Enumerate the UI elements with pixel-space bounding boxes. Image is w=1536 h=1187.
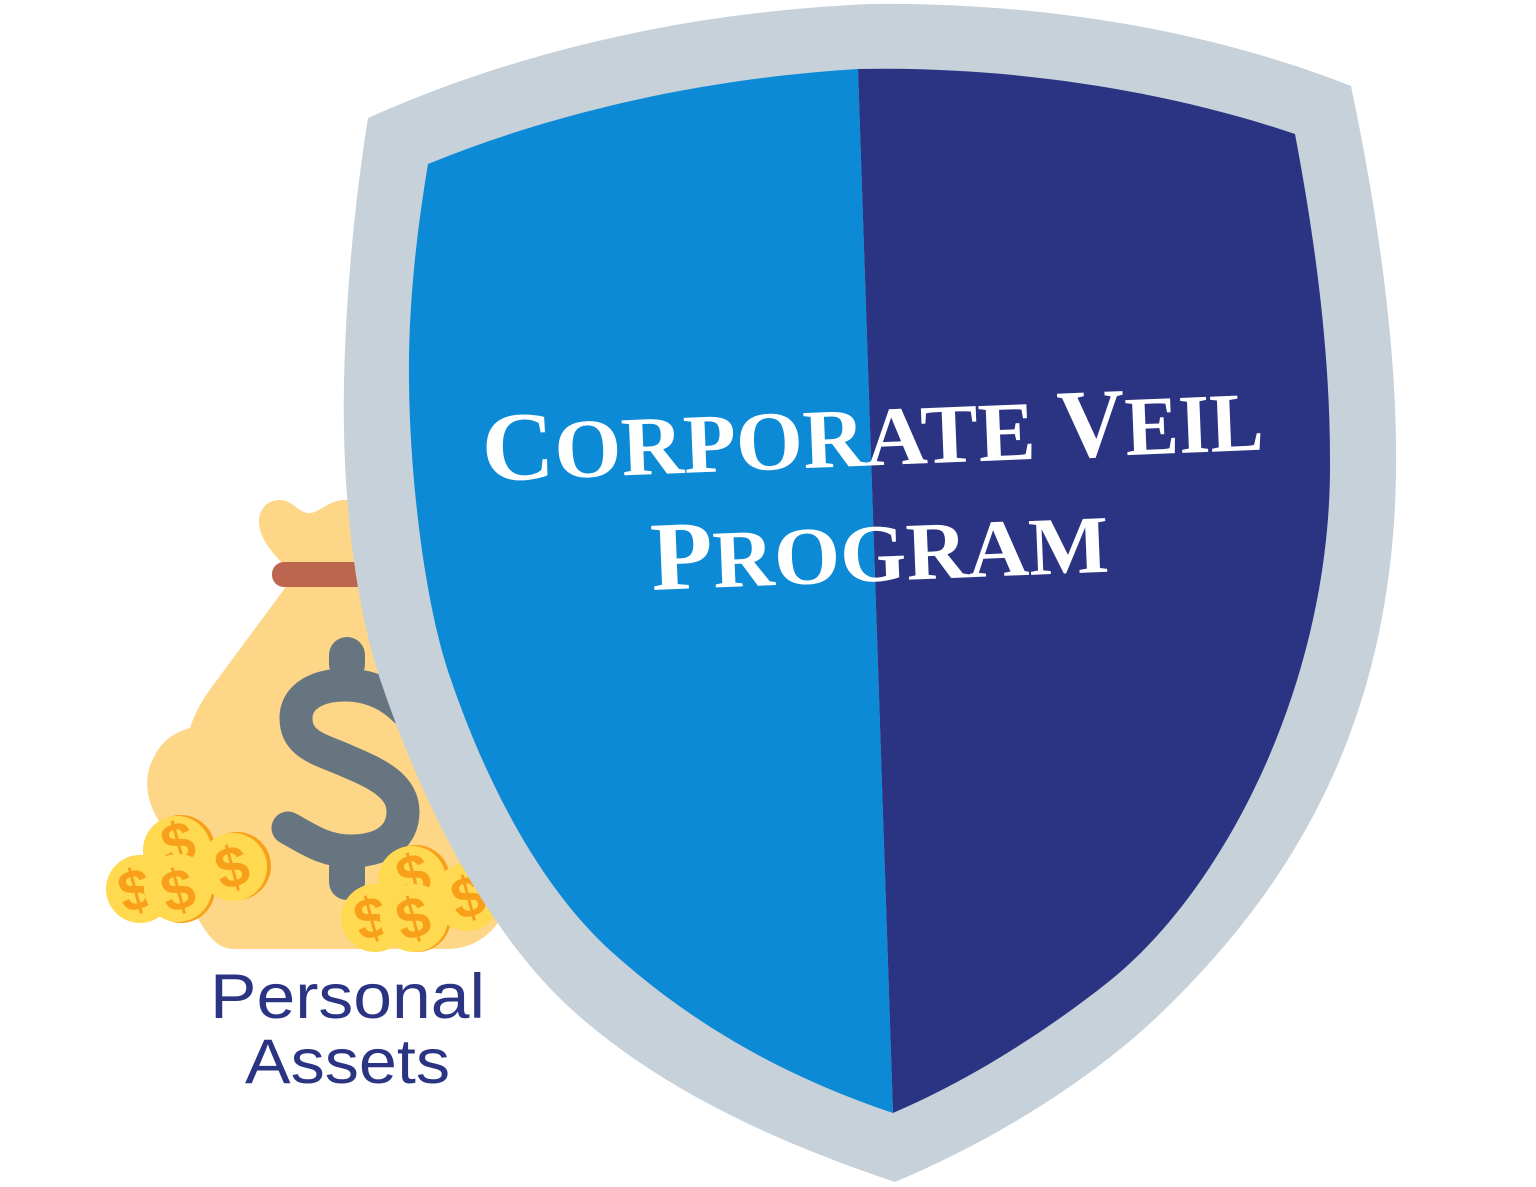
money bag body xyxy=(147,500,520,949)
coins: right group: $ xyxy=(389,840,437,911)
coins: left group: $ xyxy=(208,832,256,903)
coins: left group: $ xyxy=(154,855,202,926)
coins: left group: $ xyxy=(111,855,159,926)
coins: right group: $ xyxy=(389,883,437,954)
dollar sign xyxy=(288,637,405,900)
coins: left group: $ xyxy=(154,808,202,879)
title: CORPORATE xyxy=(480,373,1037,503)
label: personal assets xyxy=(210,962,485,1097)
coins: right group xyxy=(341,840,501,954)
shield left half xyxy=(409,69,893,1113)
shield right half xyxy=(858,69,1330,1113)
icon: money bag with coins xyxy=(106,500,520,954)
shield xyxy=(344,4,1396,1182)
bag tie band xyxy=(272,562,392,587)
title: VEIL xyxy=(1055,364,1265,480)
label: personal assets: Assets xyxy=(245,1027,450,1097)
title: PROGRAM xyxy=(649,486,1111,612)
coins: right group: $ xyxy=(444,862,492,933)
title xyxy=(480,364,1265,612)
coins: right group: $ xyxy=(347,883,395,954)
shield outer border xyxy=(344,4,1396,1182)
label: personal assets: Personal xyxy=(210,962,485,1032)
coins: left group xyxy=(106,808,271,926)
